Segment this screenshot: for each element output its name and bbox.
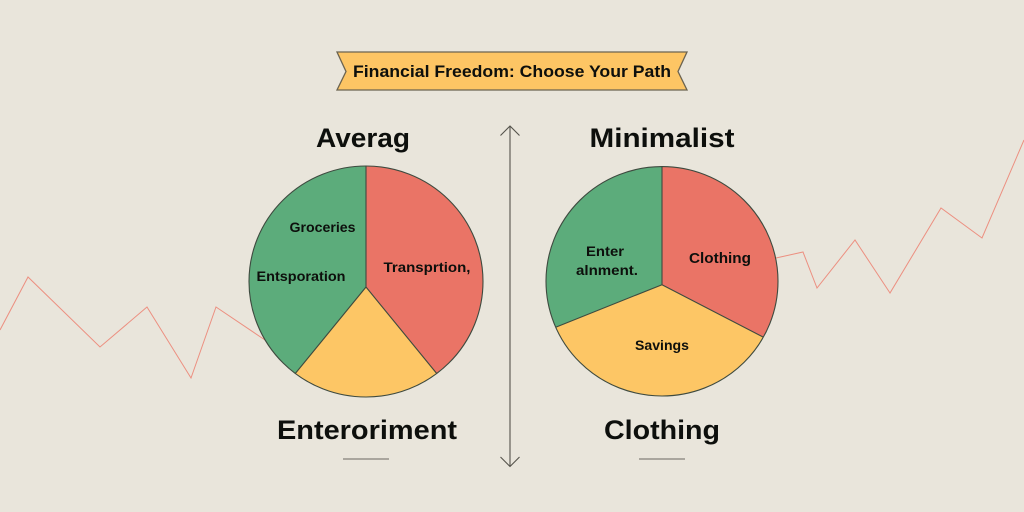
slice: red [662, 167, 778, 337]
heading: Averag: Averag [316, 123, 410, 153]
slice borders [249, 166, 483, 397]
label: Enter alnment.: Enter [586, 243, 625, 259]
pie chart: Minimalist [546, 167, 778, 396]
caption: Enteroriment: Enteroriment [277, 415, 457, 445]
heading: Minimalist: Minimalist [590, 123, 734, 153]
right trend line [776, 140, 1024, 293]
label: Transprtion: Transprtion, [384, 259, 470, 275]
label: Groceries: Groceries [290, 219, 356, 235]
label: Enter alnment.: alnment. [576, 262, 638, 278]
caption: Clothing: Clothing [604, 415, 720, 445]
slice: yellow [295, 287, 437, 397]
label: Clothing: Clothing [689, 251, 751, 267]
title banner [337, 52, 687, 90]
left trend line [0, 277, 265, 378]
slice: yellow [556, 285, 763, 396]
slice: green [249, 166, 366, 374]
slice: green [546, 167, 662, 327]
title banner: Financial Freedom: Choose Your Path [353, 63, 671, 81]
label: Enter alnment. [576, 243, 638, 278]
slice borders [546, 167, 778, 396]
label: Savings: Savings [635, 337, 689, 353]
label: Entsporation: Entsporation [256, 268, 346, 284]
pie chart: Averag [249, 166, 483, 397]
double-headed divider arrow [500, 126, 520, 466]
slice: red [366, 166, 483, 374]
